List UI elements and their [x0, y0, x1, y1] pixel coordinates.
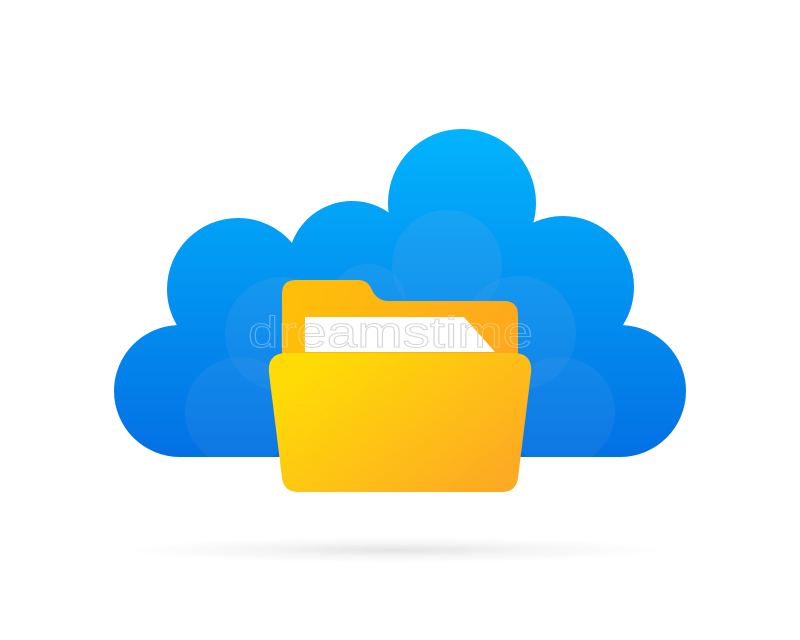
folder [269, 280, 531, 492]
watermark text: dreamstime [248, 308, 533, 357]
watermark text: dreamstime [248, 308, 533, 357]
illustration: cloud storage folder [114, 129, 686, 558]
folder back with tab [282, 280, 518, 372]
folder front [269, 353, 531, 492]
ground shadow [125, 537, 665, 563]
inner lighter cloud shapes [185, 210, 615, 467]
cloud [100, 120, 700, 467]
paper sheet [305, 317, 495, 352]
watermark text [250, 315, 532, 348]
